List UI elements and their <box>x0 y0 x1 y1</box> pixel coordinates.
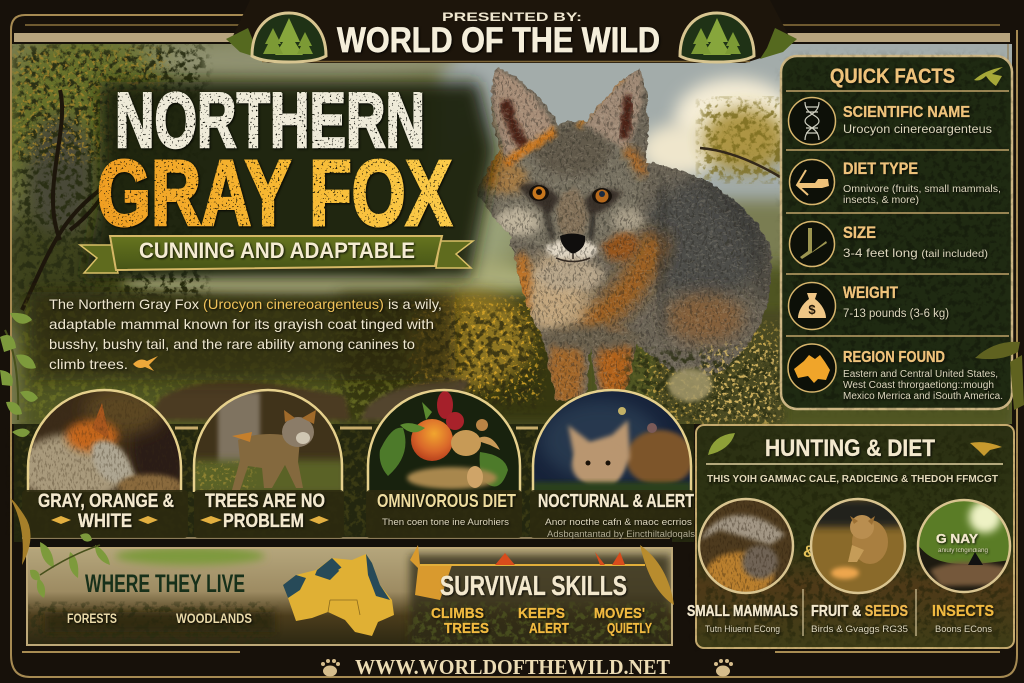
skill: keeps alert: KEEPS <box>518 605 565 622</box>
row dividers <box>786 91 1009 336</box>
decorative gold leaf <box>640 545 674 605</box>
circle: insects scene: aniuly lchgindiang <box>938 548 988 554</box>
row: region found: Mexico Merrica and iSouth America. <box>843 391 1003 402</box>
label: small mammals: Tutn Hiuenn ECong <box>705 624 780 635</box>
skill: climbs trees <box>431 605 489 637</box>
head fur <box>479 119 644 291</box>
row: size: SIZE <box>843 224 876 242</box>
feature: gray orange and white <box>17 386 188 538</box>
circle: insects scene <box>918 500 1010 592</box>
feature: omnivorous diet: Then coen tone ine Aurohiers <box>382 517 509 528</box>
fox face details <box>518 183 622 262</box>
label: fruit and seeds: Birds & Gvaggs RG35 <box>811 624 908 635</box>
intro backing <box>30 292 455 380</box>
left tree <box>0 30 204 340</box>
body fur patches <box>513 178 767 410</box>
feature: trees are no problem <box>190 390 346 538</box>
quick facts heading: QUICK FACTS <box>830 65 955 88</box>
row: region found: REGION FOUND <box>843 349 945 366</box>
row: region found: West Coast throrgaetiong::mough <box>843 380 994 391</box>
orange flourish <box>410 545 452 600</box>
feature: trees are no problem: PROBLEM <box>223 511 304 532</box>
presented by label: PRESENTED BY: <box>442 12 582 24</box>
feature: nocturnal and alert <box>530 390 696 539</box>
footer url: WWW.WORLDOFTHEWILD.NET <box>355 655 671 679</box>
circle: small mammals <box>699 499 793 596</box>
tagline ribbon <box>80 236 473 273</box>
caption: OMNIVOROUS DIET <box>377 490 517 511</box>
intro paragraph <box>49 296 442 372</box>
woodlands label: WOODLANDS <box>176 611 252 626</box>
label: fruit and seeds <box>811 603 908 635</box>
header plate <box>14 0 1010 63</box>
skill: keeps alert <box>518 605 569 637</box>
caption: GRAY, ORANGE & <box>38 491 174 512</box>
row: size: 3-4 feet long (tail included) <box>843 246 988 260</box>
icon: weight bag <box>788 282 836 330</box>
panel: where they live and survival skills <box>27 545 672 646</box>
row: scientific name: SCIENTIFIC NAME <box>843 104 970 121</box>
icon: ruler <box>790 222 834 266</box>
row: region found <box>788 344 1003 402</box>
label: fruit and seeds: FRUIT & SEEDS <box>811 603 908 620</box>
feature: nocturnal and alert: Anor nocthe cafn & maoc ecrrios <box>545 517 692 528</box>
icon: small bird arrow <box>133 356 158 371</box>
icon: leaf <box>708 433 735 455</box>
skill: moves quietly <box>594 605 652 637</box>
intro paragraph: The Northern Gray Fox (Urocyon cinereoargenteus) is a wily, <box>49 296 442 312</box>
arch image <box>368 390 520 492</box>
arch image <box>533 390 694 494</box>
right tree <box>700 100 790 180</box>
caption: TREES ARE NO <box>205 491 325 512</box>
feature: gray orange and white: WHITE <box>78 511 132 532</box>
skill: moves quietly: QUIETLY <box>607 620 652 637</box>
survival skills heading: SURVIVAL SKILLS <box>440 570 627 601</box>
circle: fruit and seeds <box>811 499 905 593</box>
intro paragraph: climb trees. <box>49 356 128 372</box>
skill: climbs trees: CLIMBS <box>431 605 484 622</box>
undergrowth <box>20 292 785 425</box>
row: diet type: Omnivore (fruits, small mammals, <box>843 183 1001 195</box>
arch image <box>29 391 180 492</box>
footer url <box>22 652 1000 679</box>
where they live heading: WHERE THEY LIVE <box>85 570 245 598</box>
brand name: WORLD OF THE WILD <box>337 21 660 60</box>
tagline ribbon: CUNNING AND ADAPTABLE <box>139 238 415 263</box>
lower strip backing <box>14 424 694 549</box>
range map <box>283 554 394 636</box>
title: Northern Gray Fox: GRAY FOX <box>97 141 452 245</box>
label: insects <box>932 603 994 635</box>
skill: moves quietly: MOVES' <box>594 605 645 622</box>
forest landscape scene <box>0 30 1024 435</box>
skill: keeps alert: ALERT <box>529 620 569 637</box>
fox nose <box>560 234 585 254</box>
caption: NOCTURNAL & ALERT <box>538 490 695 511</box>
icon: right forest badge <box>680 13 797 62</box>
apple <box>411 419 453 461</box>
icon: left forest badge <box>226 13 326 62</box>
row: weight: 7-13 pounds (3-6 kg) <box>843 308 949 320</box>
panel: hunting and diet <box>687 425 1014 648</box>
label: insects: INSECTS <box>932 603 994 620</box>
title: Northern Gray Fox: NORTHERN <box>115 76 425 164</box>
heading: HUNTING & DIET <box>765 435 935 462</box>
skill: climbs trees: TREES <box>444 620 489 637</box>
icon: diet <box>790 160 834 204</box>
fox eye left <box>529 185 549 201</box>
row: weight: WEIGHT <box>843 284 898 302</box>
panel: quick facts <box>781 56 1012 409</box>
feature: nocturnal and alert: Adsbqantantad by Eincthiltaldoqals <box>547 529 696 539</box>
row: scientific name: Urocyon cinereoargenteus <box>843 124 992 136</box>
row: diet type: DIET TYPE <box>843 160 918 178</box>
feature: omnivorous diet <box>366 390 522 538</box>
icon: sprig <box>970 442 1002 456</box>
fox illustration <box>470 60 780 410</box>
fox eye right <box>592 188 612 204</box>
row: region found: Eastern and Central United States, <box>843 369 998 380</box>
icon: weight bag: $ <box>808 302 816 317</box>
circle inset text: G NAY <box>936 531 978 546</box>
intro paragraph: adaptable mammal known for its grayish coat tinged with <box>49 316 434 332</box>
row: scientific name <box>788 98 992 144</box>
intro paragraph: busshy, bushy tail, and the rare ability among canines to <box>49 336 415 352</box>
right corner leaves <box>975 342 1024 410</box>
ampersand glyph: & <box>803 542 815 561</box>
ears <box>486 68 643 185</box>
row: size <box>790 222 988 266</box>
label: insects: Boons ECons <box>935 624 992 635</box>
forests label: FORESTS <box>67 611 117 626</box>
icon: left paw <box>321 659 340 676</box>
row: diet type: insects, & more) <box>843 194 919 206</box>
vines and leaves left edge <box>0 313 110 598</box>
foreground leaves <box>625 345 780 420</box>
label: small mammals <box>687 603 798 635</box>
icon: dna <box>788 98 836 144</box>
title: Northern Gray Fox <box>97 76 452 245</box>
icon: leaf sprig <box>974 67 1003 86</box>
title backing <box>85 82 495 278</box>
subheading: THIS YOIH GAMMAC CALE, RADICEING & THEDOH FFMCGT <box>707 473 999 485</box>
row: diet type <box>790 160 1001 206</box>
icon: region map <box>788 344 836 392</box>
row: weight <box>788 282 949 330</box>
arch image <box>195 392 341 491</box>
label: small mammals: SMALL MAMMALS <box>687 603 798 620</box>
icon: right paw <box>714 659 733 676</box>
